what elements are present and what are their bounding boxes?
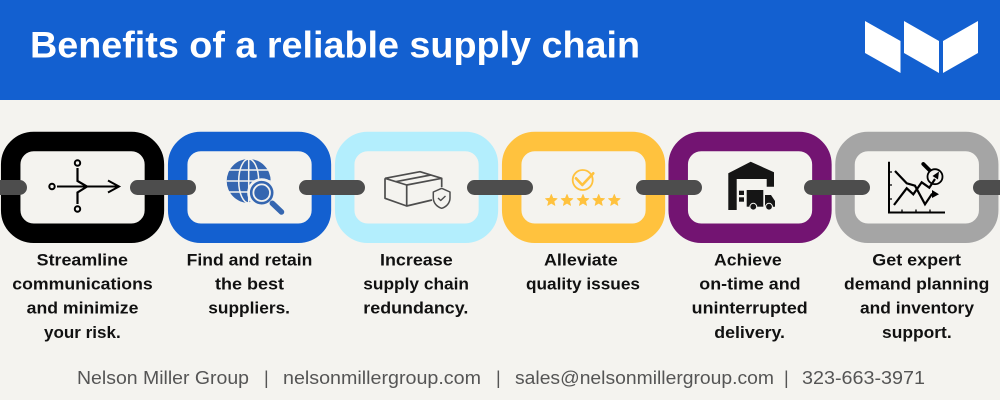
- caption 2: suppliers.: [208, 299, 290, 318]
- caption 3: [363, 251, 469, 318]
- caption 5: on-time and: [699, 275, 801, 294]
- icon: quality check and stars: [545, 170, 620, 206]
- icon: warehouse and truck: [728, 162, 775, 210]
- footer contact line: |: [264, 368, 269, 388]
- caption 5: Achieve: [714, 251, 782, 270]
- caption 6: Get expert: [872, 251, 961, 270]
- chain links: [11, 142, 989, 233]
- icon: globe with magnifier: [227, 159, 282, 212]
- caption 6: support.: [882, 323, 952, 342]
- footer contact line: nelsonmillergroup.com: [283, 368, 481, 388]
- icon: converging arrows: [49, 160, 119, 212]
- header banner: [0, 0, 1000, 100]
- caption 2: Find and retain: [187, 251, 312, 270]
- caption 2: the best: [215, 275, 284, 294]
- caption 3: Increase: [380, 251, 453, 270]
- footer contact line: 323-663-3971: [802, 368, 925, 388]
- caption 1: your risk.: [44, 323, 121, 342]
- caption 4: quality issues: [526, 275, 640, 294]
- caption 6: demand planning: [844, 275, 989, 294]
- chain connectors: [0, 180, 1000, 195]
- caption 4: [526, 251, 640, 294]
- caption 5: [692, 251, 808, 342]
- footer contact line: |: [784, 368, 789, 388]
- caption 3: supply chain: [363, 275, 469, 294]
- caption 2: [187, 251, 312, 318]
- footer contact line: sales@nelsonmillergroup.com: [515, 368, 774, 388]
- caption 6: and inventory: [860, 299, 975, 318]
- caption 1: and minimize: [27, 299, 138, 318]
- footer contact line: [77, 368, 925, 388]
- footer contact line: |: [496, 368, 501, 388]
- caption 5: uninterrupted: [692, 299, 808, 318]
- caption 4: Alleviate: [544, 251, 618, 270]
- footer contact line: Nelson Miller Group: [77, 368, 249, 388]
- caption 1: [12, 251, 153, 342]
- icon: box with shield: [385, 172, 450, 208]
- title: Benefits of a reliable supply chain: [30, 24, 640, 66]
- caption 3: redundancy.: [363, 299, 468, 318]
- caption 1: communications: [12, 275, 153, 294]
- caption 5: delivery.: [714, 323, 785, 342]
- caption 1: Streamline: [37, 251, 128, 270]
- icon: demand chart: [889, 162, 945, 212]
- caption 6: [844, 251, 989, 342]
- logo: [865, 21, 978, 73]
